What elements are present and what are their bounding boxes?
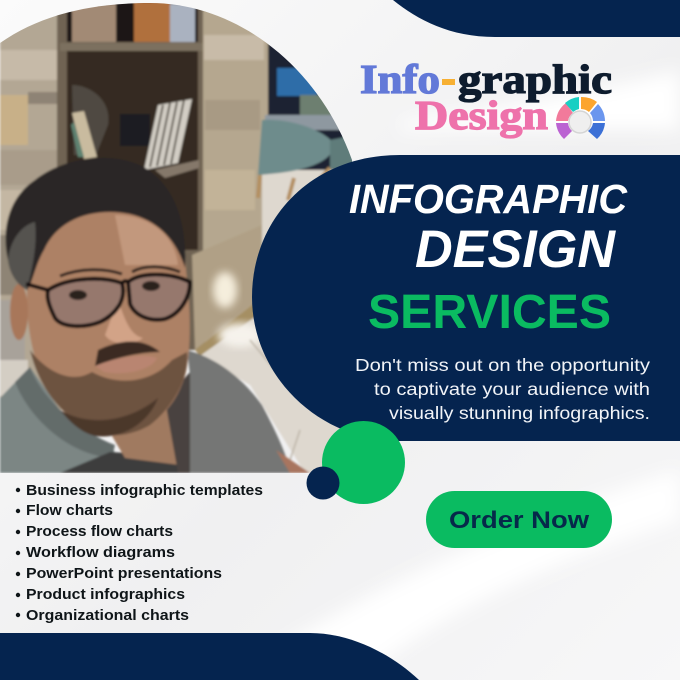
top navy shape	[393, 0, 680, 37]
window	[264, 43, 344, 172]
neck	[112, 405, 180, 465]
description text: Don't miss out on the opportunity	[355, 355, 650, 375]
list item: powerpoint: PowerPoint presentations	[26, 566, 222, 582]
description text: visually stunning infographics.	[389, 403, 650, 423]
list item: organizational: Organizational charts	[26, 608, 189, 624]
description text	[355, 355, 650, 423]
title: infographic: INFOGRAPHIC	[349, 176, 628, 222]
shirt right	[187, 350, 291, 473]
logo	[360, 56, 612, 139]
decorative navy circle	[306, 466, 340, 500]
list item: product: Product infographics	[26, 587, 185, 603]
list item: business: Business infographic templates	[26, 483, 263, 499]
logo word: graphic: graphic	[458, 56, 612, 102]
logo word: info: Info	[360, 56, 440, 102]
services list	[16, 483, 263, 624]
stone column right	[192, 0, 269, 356]
order now button: Order Now	[449, 507, 589, 534]
bookshelf	[57, 0, 205, 350]
collar band	[15, 367, 115, 458]
bottom navy shape	[0, 633, 419, 680]
shirt left	[0, 367, 120, 473]
logo hyphen	[442, 79, 455, 85]
decorative green circle	[322, 421, 405, 504]
logo word: design: Design	[415, 92, 548, 138]
photo: man in front of bookshelf	[0, 0, 360, 473]
description text: to captivate your audience with	[374, 379, 650, 399]
list item: process flow: Process flow charts	[26, 524, 173, 540]
navy panel	[252, 155, 680, 441]
face	[26, 210, 191, 412]
marble floor	[203, 168, 340, 473]
mouth and moustache	[97, 356, 156, 372]
eyes	[69, 281, 160, 300]
hair	[6, 158, 185, 290]
list item: flow charts: Flow charts	[26, 503, 113, 519]
list item: workflow: Workflow diagrams	[26, 545, 175, 561]
icon: logo donut	[556, 97, 605, 139]
beard	[30, 350, 187, 435]
teal chair	[258, 120, 355, 200]
title: services: SERVICES	[368, 286, 611, 339]
glasses	[26, 274, 190, 326]
title: design: DESIGN	[415, 220, 617, 279]
placket	[165, 372, 190, 473]
eyebrows	[60, 267, 180, 276]
stone wall left	[0, 0, 62, 410]
order now button	[426, 491, 612, 548]
